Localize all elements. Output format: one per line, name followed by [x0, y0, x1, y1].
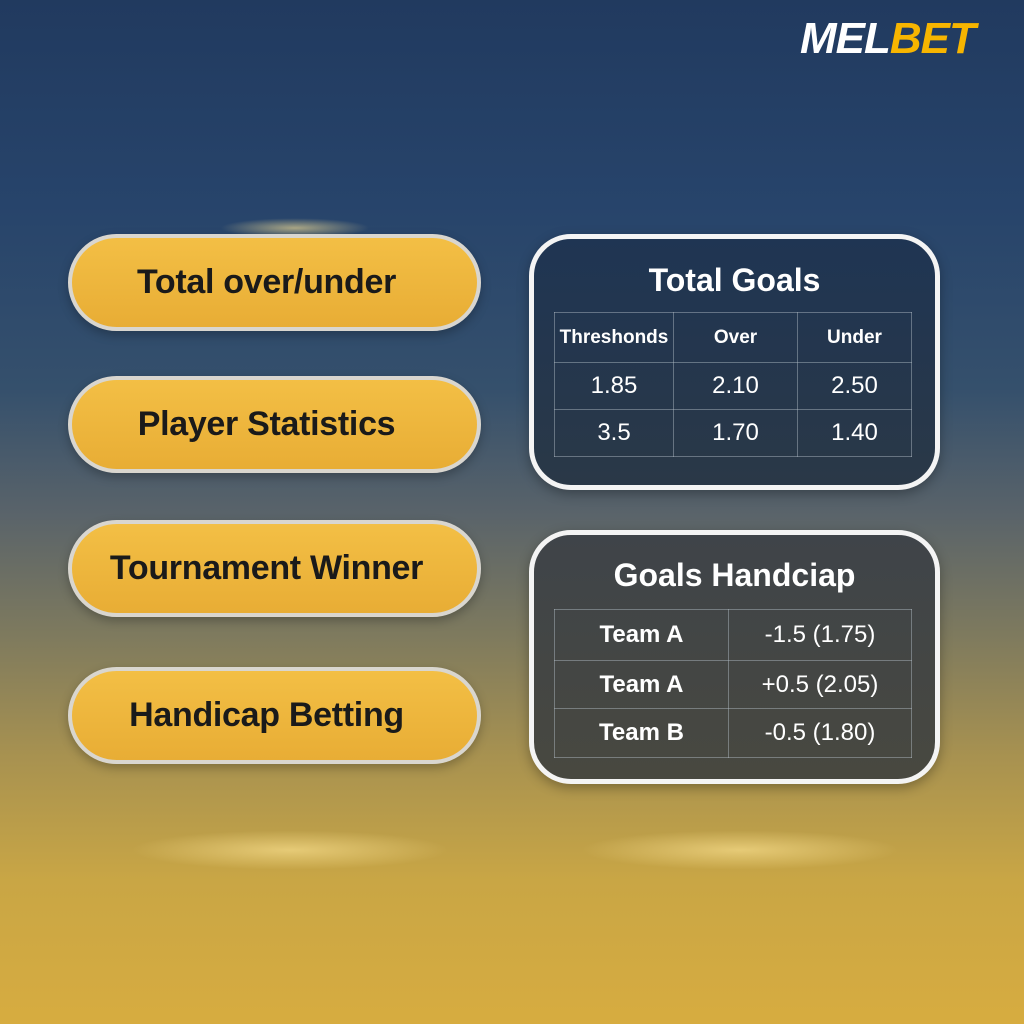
table: total goals: Over [714, 326, 757, 348]
table: handicap: Team A [599, 621, 684, 648]
table: total goals [554, 312, 912, 457]
table: total goals: 2.50 [831, 372, 878, 399]
panel: Total Goals [529, 234, 940, 490]
table: total goals: Threshonds [560, 326, 668, 348]
table: total goals: 2.10 [712, 372, 759, 399]
pill: Tournament Winner [68, 520, 481, 617]
table: total goals: 1.85 [591, 372, 637, 399]
pill: Player Statistics [68, 376, 481, 473]
table: total goals: 1.70 [712, 419, 759, 446]
pill: Player Statistics: Player Statistics [138, 405, 395, 443]
pill: Total over/under: Total over/under [137, 263, 396, 301]
panel: Goals Handicap [529, 530, 940, 784]
pill: Total over/under [68, 234, 481, 331]
table: handicap [554, 609, 912, 758]
table: total goals: Under [827, 326, 882, 348]
table: handicap: Team A [599, 670, 684, 698]
panel title: Goals Handciap [614, 557, 855, 593]
table: handicap: +0.5 (2.05) [762, 670, 878, 698]
table: total goals: 1.40 [831, 419, 878, 446]
pill: Handicap Betting [68, 667, 481, 764]
decorative glows [220, 218, 370, 238]
table: total goals: 3.5 [597, 419, 631, 446]
table: handicap: Team B [599, 719, 684, 746]
table: handicap: -0.5 (1.80) [765, 719, 875, 746]
pill: Handicap Betting: Handicap Betting [129, 696, 404, 734]
panel title: Total Goals [649, 262, 820, 298]
table: handicap: -1.5 (1.75) [765, 621, 875, 648]
logo: MELBET [800, 14, 975, 63]
pill: Tournament Winner: Tournament Winner [110, 549, 423, 587]
